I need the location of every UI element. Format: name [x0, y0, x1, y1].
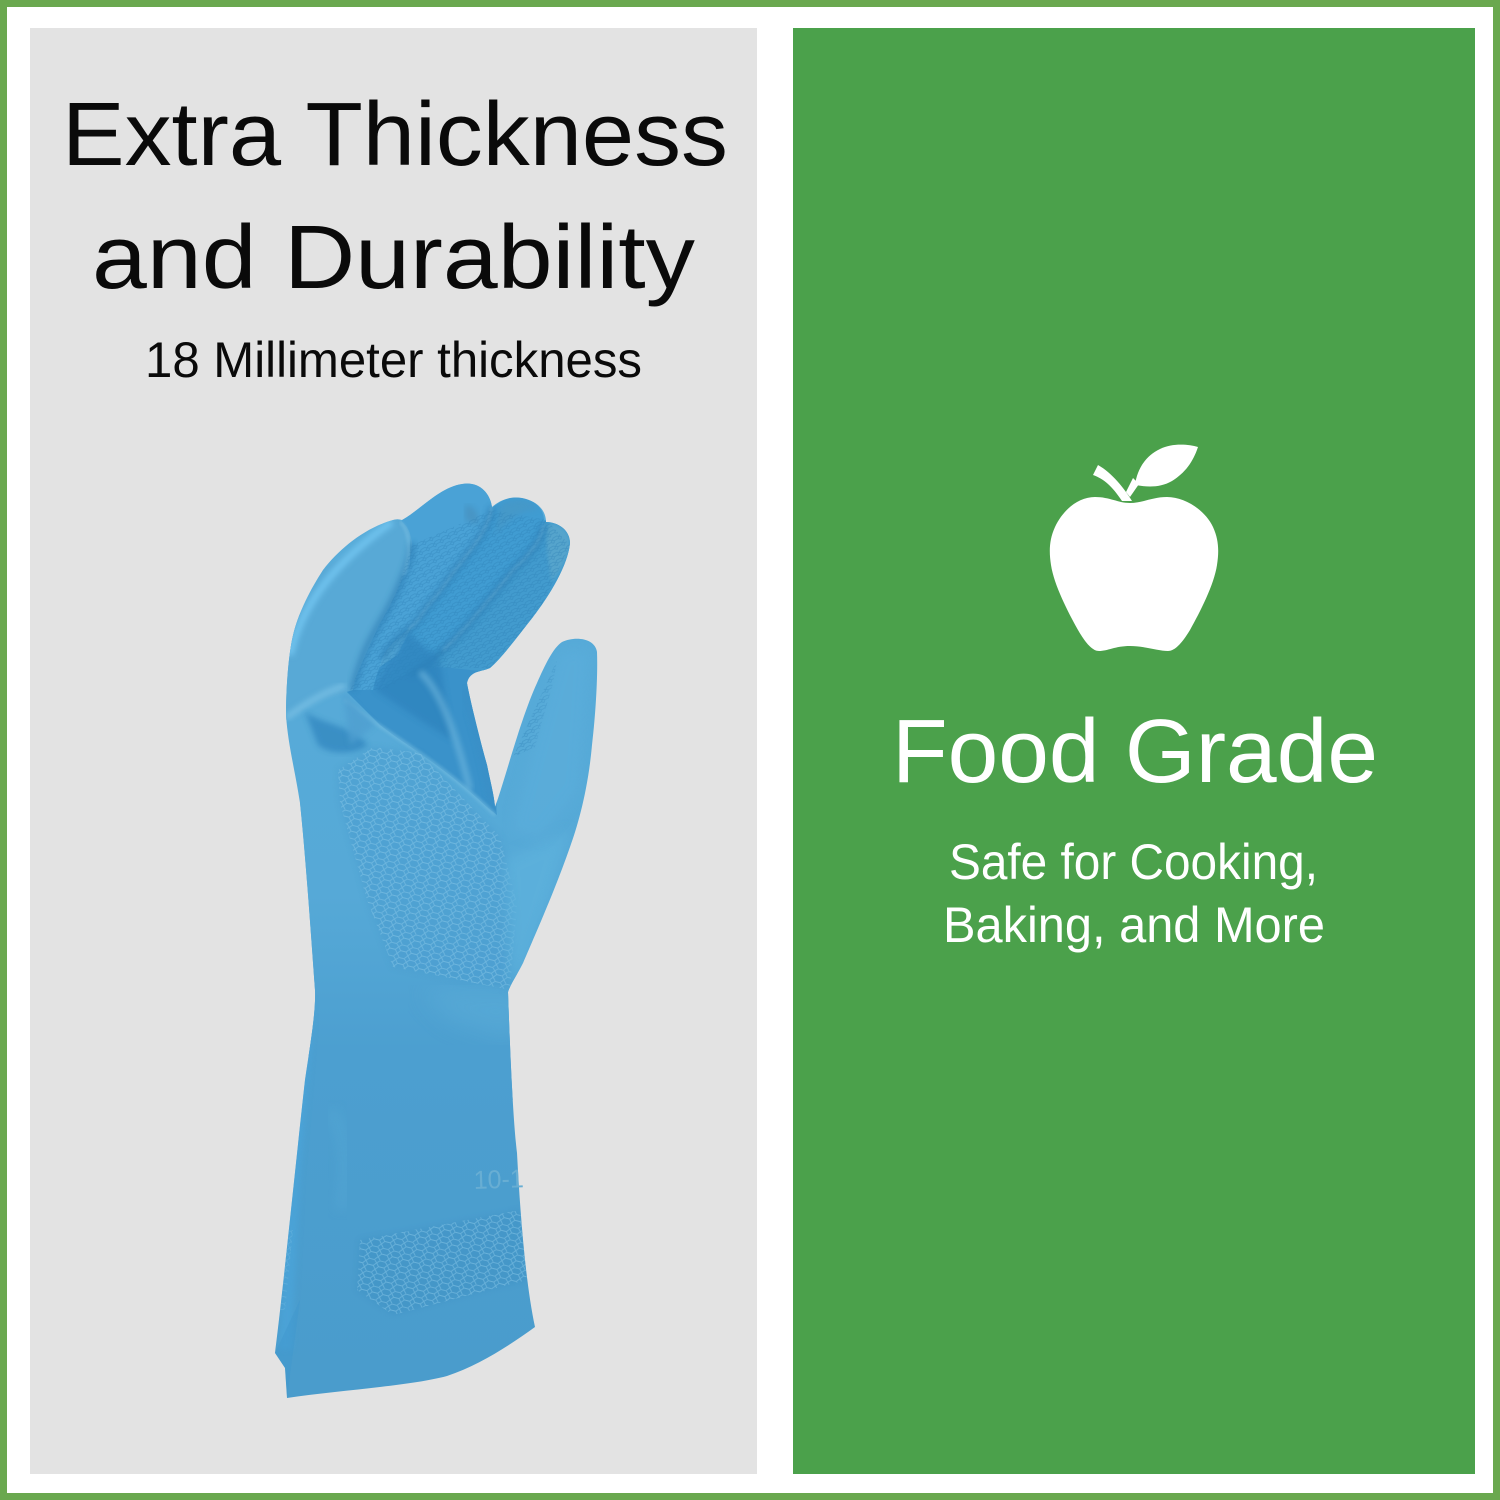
- highlights: [508, 872, 550, 974]
- subheading: thickness: 18 Millimeter thickness: [145, 332, 642, 388]
- under-finger base: [347, 656, 497, 815]
- index finger: [286, 520, 412, 720]
- text: food grade description: Baking, and More: [943, 897, 1325, 953]
- heading: food grade: Food Grade: [892, 702, 1378, 802]
- text: food grade description: [943, 834, 1325, 953]
- palm honeycomb: [418, 753, 421, 756]
- heading: extra thickness: and Durability: [92, 208, 695, 308]
- size mark: 10-1: [473, 1163, 524, 1195]
- wrist fold: [286, 686, 345, 718]
- icon: apple: [1050, 445, 1218, 651]
- valleys and folds: [379, 634, 448, 734]
- panel: extra thickness: [30, 28, 757, 1474]
- text: food grade description: Safe for Cooking,: [949, 834, 1318, 890]
- heading: extra thickness: Extra Thickness: [62, 85, 728, 185]
- finger textures: [350, 510, 570, 690]
- panel: food grade: [793, 28, 1475, 1474]
- thumb texture: [514, 666, 556, 755]
- ring finger: [398, 498, 544, 654]
- pinky finger: [430, 520, 570, 671]
- glove photo: [275, 484, 597, 1398]
- cuff honeycomb: [522, 1232, 526, 1272]
- heading: extra thickness: [62, 85, 728, 308]
- palm region: [300, 739, 518, 1100]
- middle finger: [350, 484, 492, 690]
